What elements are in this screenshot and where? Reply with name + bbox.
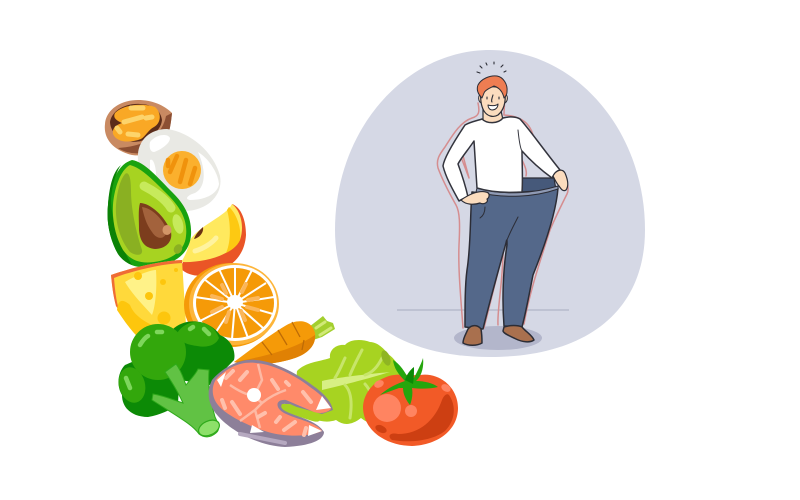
head xyxy=(481,87,505,116)
food: carrot xyxy=(234,316,335,364)
food: salmon steak xyxy=(209,360,333,447)
food: apple slice xyxy=(180,204,246,276)
food: avocado xyxy=(107,160,191,267)
food: cheese xyxy=(111,260,186,339)
trouser seams xyxy=(480,207,518,243)
food: orange slice xyxy=(184,263,279,347)
shirt fold xyxy=(518,130,522,151)
food: broccoli xyxy=(115,321,234,439)
hair xyxy=(477,76,507,98)
previous body outline xyxy=(437,100,568,328)
waistband xyxy=(476,186,558,196)
trousers back waistband xyxy=(521,178,556,192)
smile xyxy=(488,104,498,110)
shoe left xyxy=(463,326,482,345)
floor shadow xyxy=(454,326,542,350)
panel: blob background xyxy=(335,50,645,357)
ears xyxy=(479,94,507,103)
floor line xyxy=(397,309,569,311)
right hand xyxy=(553,170,568,191)
food: walnut xyxy=(105,100,172,155)
neck xyxy=(483,106,503,123)
food: tomato xyxy=(363,358,458,446)
left hand on hip xyxy=(461,192,489,204)
food: lettuce xyxy=(277,340,402,424)
shirt xyxy=(443,117,560,201)
trousers xyxy=(465,188,558,329)
shoe right xyxy=(503,326,534,342)
food: boiled egg xyxy=(138,129,220,211)
face details xyxy=(487,95,499,102)
surprise lines xyxy=(477,62,506,73)
illustration: man with oversized trousers xyxy=(437,62,568,345)
